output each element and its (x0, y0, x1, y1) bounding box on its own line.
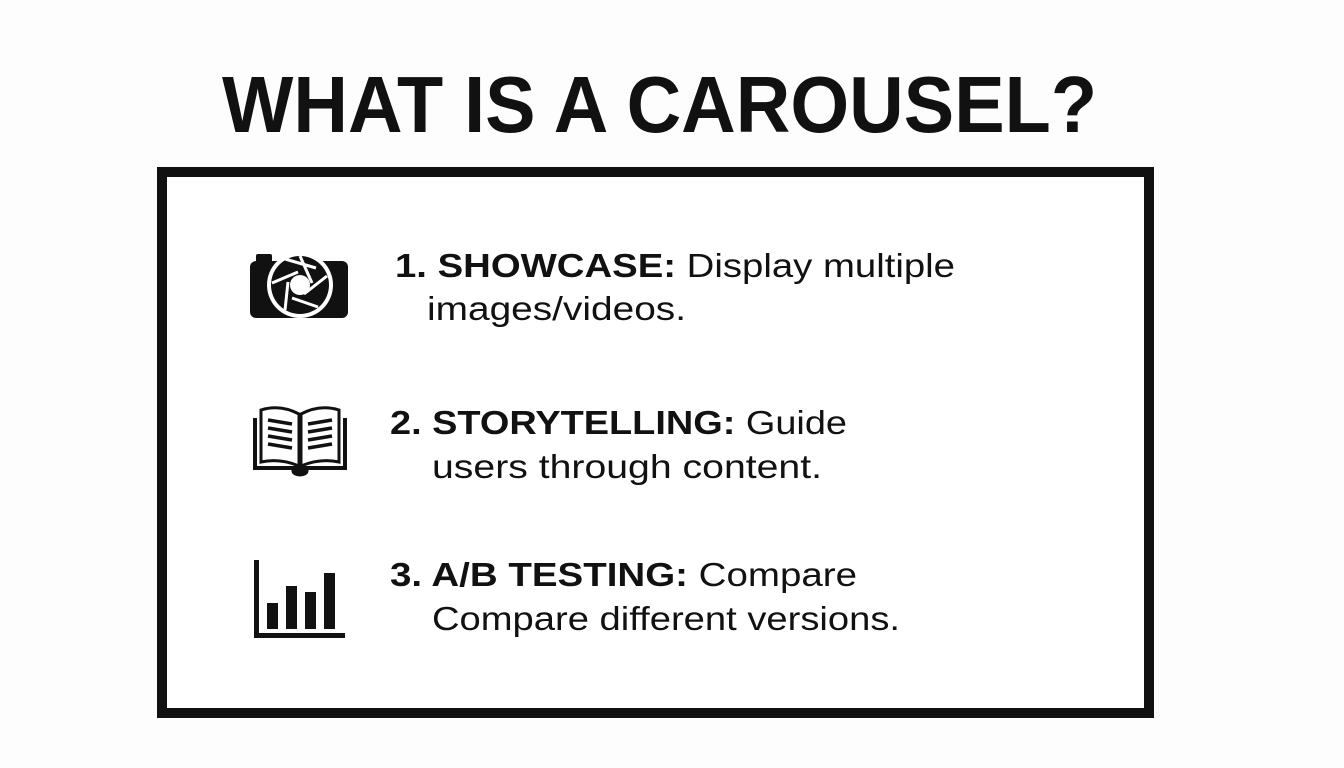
icon: bar chart (254, 560, 345, 638)
text: item 3: 3. A/B TESTING: Compare (390, 556, 857, 593)
text: item 2 (390, 404, 847, 485)
panel: carousel features (162, 172, 1149, 713)
icon: camera (250, 252, 348, 318)
text: item 1 (395, 247, 955, 327)
text: item 1: images/videos. (427, 290, 686, 327)
title: WHAT IS A CAROUSEL? (222, 60, 1097, 149)
text: item 2: users through content. (432, 448, 822, 485)
text: item 3: Compare different versions. (432, 600, 900, 637)
text: item 3 (390, 556, 900, 637)
text: item 1: 1. SHOWCASE: Display multiple (395, 247, 955, 284)
icon: open book (255, 408, 345, 475)
text: item 2: 2. STORYTELLING: Guide (390, 404, 847, 441)
